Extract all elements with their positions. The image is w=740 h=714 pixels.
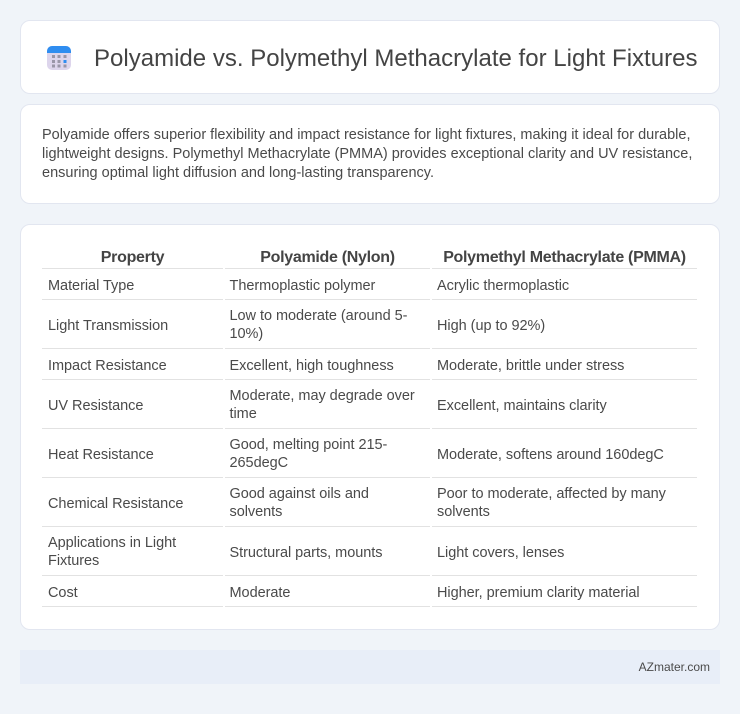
row: cost: [42, 585, 697, 607]
row: uv resistance: UV Resistance: [48, 398, 143, 414]
row: heat resistance: [42, 437, 697, 478]
table header row: Polyamide (Nylon): [260, 249, 395, 266]
row: applications: [42, 535, 697, 576]
row: chemical resistance: Poor to moderate, affected by many: [437, 486, 666, 502]
row: impact resistance: Impact Resistance: [48, 358, 167, 374]
row: heat resistance: 265degC: [230, 455, 288, 471]
row: applications: Applications in Light: [48, 535, 176, 551]
table header row: [42, 249, 697, 269]
row: material type: Material Type: [48, 278, 134, 294]
table header row: Property: [101, 249, 164, 266]
row: chemical resistance: Good against oils and: [230, 486, 369, 502]
row: impact resistance: Moderate, brittle under stress: [437, 358, 624, 374]
row: material type: Thermoplastic polymer: [230, 278, 375, 294]
row: light transmission: Low to moderate (around 5-: [230, 308, 407, 324]
row: uv resistance: Moderate, may degrade over: [230, 388, 415, 404]
row: cost: Cost: [48, 585, 78, 601]
row: impact resistance: Excellent, high toughness: [230, 358, 394, 374]
comparison table: [42, 249, 697, 607]
summary text: [42, 127, 692, 181]
table header row: Polymethyl Methacrylate (PMMA): [443, 249, 686, 266]
row: uv resistance: time: [230, 406, 257, 422]
row: chemical resistance: solvents: [437, 504, 490, 520]
row: material type: Acrylic thermoplastic: [437, 278, 569, 294]
title: Polyamide vs. Polymethyl Methacrylate for Light Fixtures: [94, 45, 697, 72]
summary text: Polyamide offers superior flexibility and impact resistance for light fixtures, making it ideal for durable,: [42, 127, 690, 143]
row: uv resistance: [42, 388, 697, 429]
row: cost: Moderate: [230, 585, 290, 601]
summary text: ensuring optimal light diffusion and long-lasting transparency.: [42, 165, 434, 181]
icon: calendar: [47, 46, 71, 70]
row: cost: Higher, premium clarity material: [437, 585, 640, 601]
row: heat resistance: Heat Resistance: [48, 447, 154, 463]
row: light transmission: 10%): [230, 326, 263, 342]
row: light transmission: Light Transmission: [48, 318, 168, 334]
row: light transmission: High (up to 92%): [437, 318, 545, 334]
row: impact resistance: [42, 358, 697, 380]
row: heat resistance: Moderate, softens around 160degC: [437, 447, 664, 463]
footer credit: AZmater.com: [639, 660, 710, 674]
panel: summary: [20, 104, 720, 204]
row: applications: Structural parts, mounts: [230, 545, 382, 561]
row: material type: [42, 278, 697, 300]
footer bar: [20, 650, 720, 684]
row: uv resistance: Excellent, maintains clarity: [437, 398, 607, 414]
row: light transmission: [42, 308, 697, 349]
row: chemical resistance: solvents: [230, 504, 282, 520]
row: applications: Light covers, lenses: [437, 545, 564, 561]
row: applications: Fixtures: [48, 553, 99, 569]
row: chemical resistance: [42, 486, 697, 527]
summary text: lightweight designs. Polymethyl Methacrylate (PMMA) provides exceptional clarity and UV resistance,: [42, 146, 692, 162]
panel: comparison table: [20, 224, 720, 630]
row: heat resistance: Good, melting point 215-: [230, 437, 387, 453]
row: chemical resistance: Chemical Resistance: [48, 496, 183, 512]
panel: header: [20, 20, 720, 94]
